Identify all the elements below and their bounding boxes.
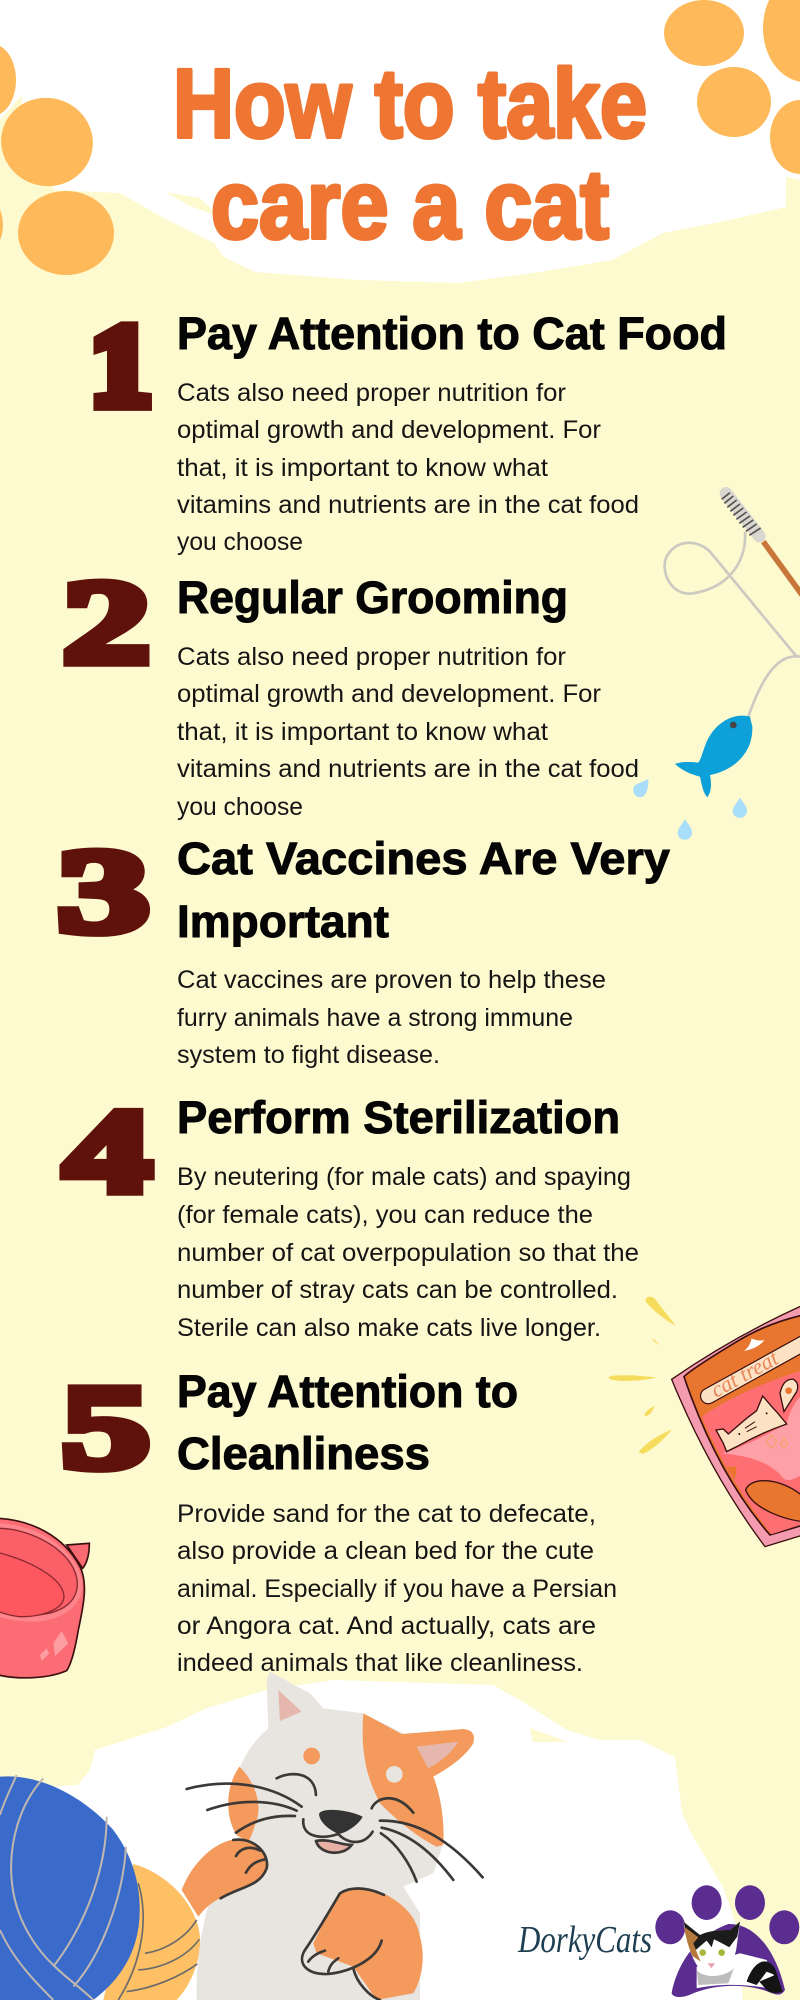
blue yarn ball <box>0 1775 140 2000</box>
heading: Important <box>177 896 389 947</box>
water <box>0 1553 64 1617</box>
eyes and nose <box>699 1949 706 1956</box>
icon: pink pet bowl <box>0 1518 89 1678</box>
string <box>665 532 800 717</box>
logo: purple paw with calico cat <box>655 1885 799 1997</box>
number 3: 3 <box>58 826 149 957</box>
heading: Pay Attention to <box>177 1366 518 1417</box>
body text <box>177 643 639 821</box>
section 2: grooming <box>177 572 639 821</box>
body text: that, it is important to know what <box>177 454 548 482</box>
body text: optimal growth and development. For <box>177 680 601 708</box>
body text: that, it is important to know what <box>177 718 548 746</box>
fish eye <box>730 722 737 728</box>
icon: cat treat bag with sparkle rays <box>608 1297 800 1547</box>
icon: left paw print <box>0 44 114 275</box>
number 5: 5 <box>62 1362 149 1493</box>
body text: animal. Especially if you have a Persian <box>177 1575 617 1603</box>
body text <box>177 1500 617 1677</box>
ear <box>67 1543 89 1568</box>
body text: you choose <box>177 793 303 821</box>
icon: right paw print <box>664 0 800 174</box>
bowl body <box>0 1518 84 1678</box>
chest fur <box>697 1968 734 1985</box>
illustration: yarn balls <box>0 1775 200 2000</box>
heading: Cat Vaccines Are Very <box>177 833 670 884</box>
title: care a cat <box>211 150 609 259</box>
illustration: happy cat <box>182 1672 483 2000</box>
heading: Cleanliness <box>177 1428 430 1479</box>
icon: cat treat bag with sparkle rays: cat treat <box>706 1345 783 1402</box>
rim highlight <box>0 1523 83 1622</box>
body text <box>177 379 639 556</box>
body text: system to fight disease. <box>177 1041 440 1069</box>
bottom fish shape <box>746 1481 800 1522</box>
body text: number of cat overpopulation so that the <box>177 1239 639 1267</box>
section 4: sterilization <box>177 1092 639 1342</box>
black patch on back <box>747 1961 783 1993</box>
number 1: 1 <box>91 302 151 429</box>
icon: fishing-rod cat toy with blue fish <box>633 493 800 840</box>
heading: Regular Grooming <box>177 572 568 623</box>
head <box>683 1922 740 1976</box>
title <box>173 49 647 259</box>
body text: (for female cats), you can reduce the <box>177 1201 593 1229</box>
body text: Sterile can also make cats live longer. <box>177 1314 601 1342</box>
body text: number of stray cats can be controlled. <box>177 1276 618 1304</box>
white brush blob behind title <box>0 0 800 283</box>
right arm <box>313 1889 423 2000</box>
fish <box>675 716 752 797</box>
logo: DorkyCats wordmark: DorkyCats <box>517 1919 652 1961</box>
heading <box>177 1366 518 1479</box>
body text: you choose <box>177 528 303 556</box>
heading <box>177 833 670 947</box>
body text: By neutering (for male cats) and spaying <box>177 1163 631 1191</box>
label pill <box>708 1342 800 1396</box>
left paw <box>182 1838 267 1917</box>
body text <box>177 1163 639 1342</box>
hanger hole <box>744 1338 764 1351</box>
bag <box>672 1305 800 1547</box>
main pad <box>672 1924 785 1997</box>
orange yarn ball <box>103 1864 200 2000</box>
bowl interior <box>0 1528 77 1615</box>
rod <box>763 542 800 597</box>
body text: Cats also need proper nutrition for <box>177 643 566 671</box>
section 3: vaccines <box>177 833 670 1069</box>
raised paw <box>780 1379 798 1412</box>
heading: Perform Sterilization <box>177 1092 620 1143</box>
body text: Cat vaccines are proven to help these <box>177 966 606 994</box>
number 2: 2 <box>63 557 150 688</box>
body text: also provide a clean bed for the cute <box>177 1537 594 1565</box>
body text: Provide sand for the cat to defecate, <box>177 1500 596 1528</box>
white brush blob at bottom <box>0 1680 743 2000</box>
body text: Cats also need proper nutrition for <box>177 379 566 407</box>
sparkles <box>40 1631 68 1661</box>
section 5: cleanliness <box>177 1366 617 1677</box>
sparkle rays <box>608 1297 676 1454</box>
feather tassel <box>722 493 761 536</box>
body text: vitamins and nutrients are in the cat food <box>177 755 639 783</box>
cream cat <box>716 1396 787 1452</box>
cat body <box>697 1953 782 1992</box>
body <box>197 1672 444 2000</box>
toes <box>655 1885 799 1944</box>
orange head patch and ear <box>363 1713 474 1847</box>
body text: indeed animals that like cleanliness. <box>177 1649 583 1677</box>
nose <box>319 1810 363 1834</box>
outlines, whiskers and face <box>187 1774 483 2000</box>
body text: optimal growth and development. For <box>177 416 601 444</box>
heading: Pay Attention to Cat Food <box>177 308 727 359</box>
body text: or Angora cat. And actually, cats are <box>177 1612 596 1640</box>
body text: furry animals have a strong immune <box>177 1004 573 1032</box>
water drops <box>633 779 747 840</box>
body text <box>177 966 606 1069</box>
title: How to take <box>173 49 647 158</box>
number 4: 4 <box>64 1086 151 1217</box>
section 1: cat food <box>177 308 727 556</box>
body text: vitamins and nutrients are in the cat food <box>177 491 639 519</box>
orange cheek <box>228 1767 258 1842</box>
